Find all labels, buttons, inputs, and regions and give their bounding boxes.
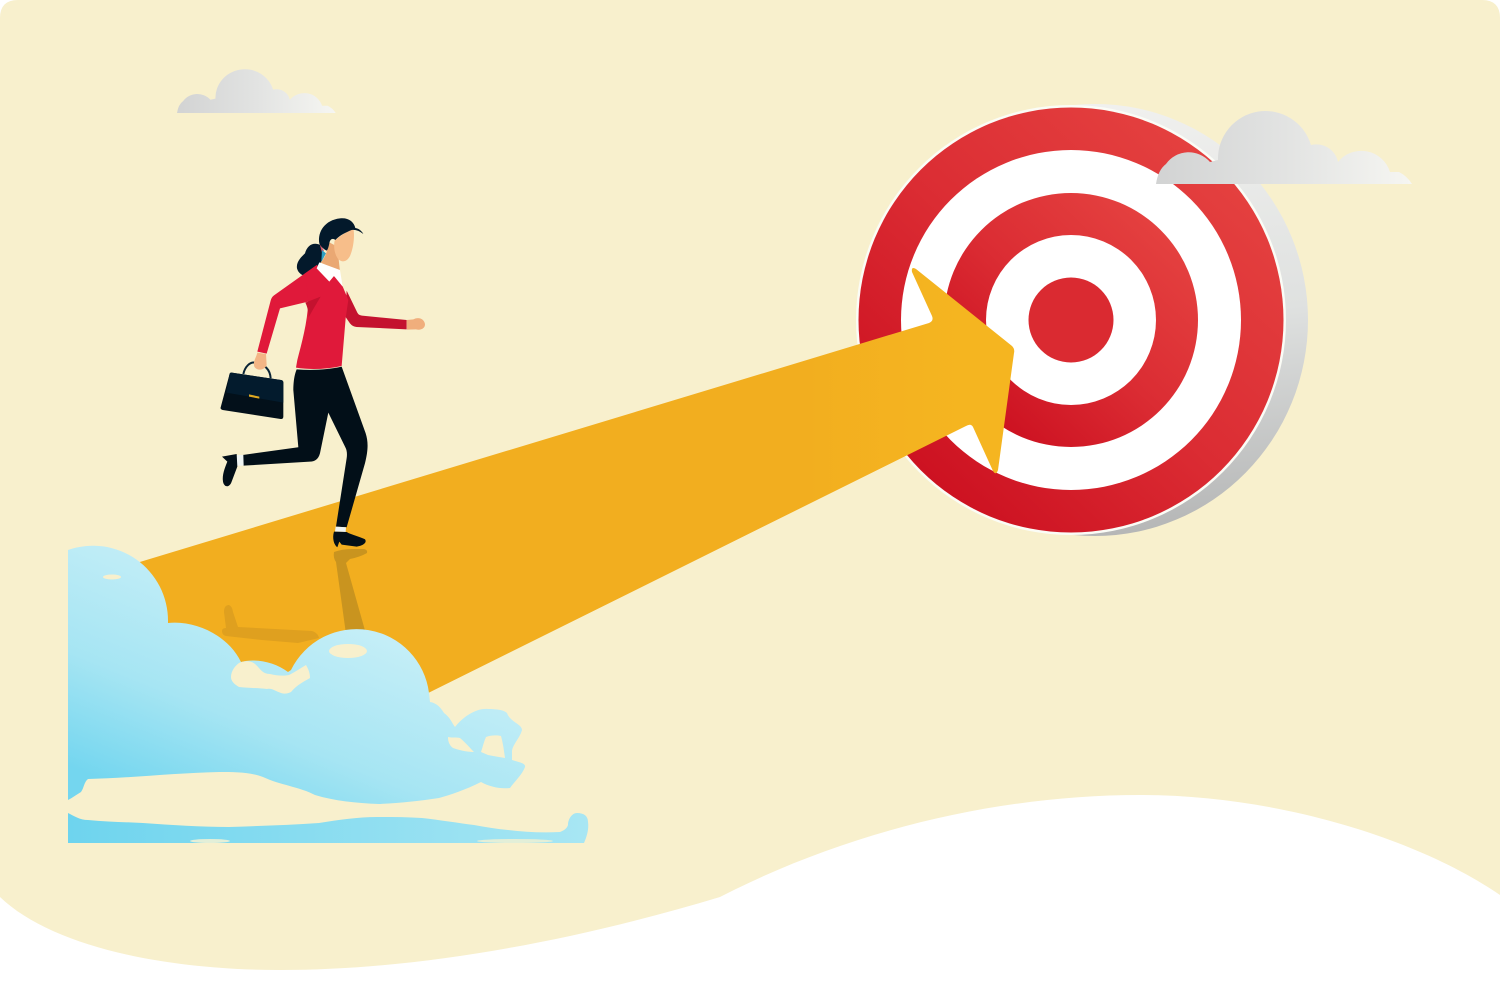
strip highlight left (190, 839, 230, 843)
outer white ring (901, 150, 1241, 490)
blue cloud foreground (68, 546, 588, 843)
main cloud body (68, 546, 525, 804)
target side rim (882, 104, 1308, 536)
handbag handle (243, 363, 271, 378)
inner white ring (986, 235, 1156, 405)
face (334, 228, 354, 261)
cloud gap right one (448, 737, 474, 752)
right arm (345, 291, 407, 329)
hair (319, 218, 363, 251)
back sock (237, 455, 244, 466)
cloud highlight small (103, 574, 121, 580)
torso (296, 265, 348, 369)
target outline (856, 105, 1286, 535)
woman's reflection on arrow (222, 549, 367, 643)
cloud highlight large (329, 644, 367, 658)
strip highlight right (477, 839, 553, 843)
right hand (407, 318, 425, 330)
front shoe (333, 532, 366, 547)
cloud lower strip (68, 813, 588, 843)
inner red ring (944, 193, 1198, 447)
handbag (221, 373, 283, 419)
yellow arrow (100, 268, 1014, 720)
back shoe (222, 454, 237, 486)
trousers (243, 367, 368, 527)
outer red ring (858, 108, 1284, 532)
bag clasp (249, 394, 259, 399)
cloud gap right two (481, 735, 505, 758)
bullseye (1028, 278, 1114, 362)
armpit shadow (305, 297, 321, 317)
cloud gap centre (231, 661, 310, 694)
ponytail (297, 244, 324, 276)
businesswoman (221, 218, 425, 547)
left arm (257, 265, 317, 354)
target (856, 104, 1308, 536)
front sock (335, 527, 346, 532)
hair tie (319, 243, 324, 253)
left hand (254, 353, 267, 370)
collar (317, 262, 343, 287)
large cloud over target (1156, 111, 1412, 184)
neck (321, 242, 340, 272)
small cloud top left (177, 69, 336, 113)
